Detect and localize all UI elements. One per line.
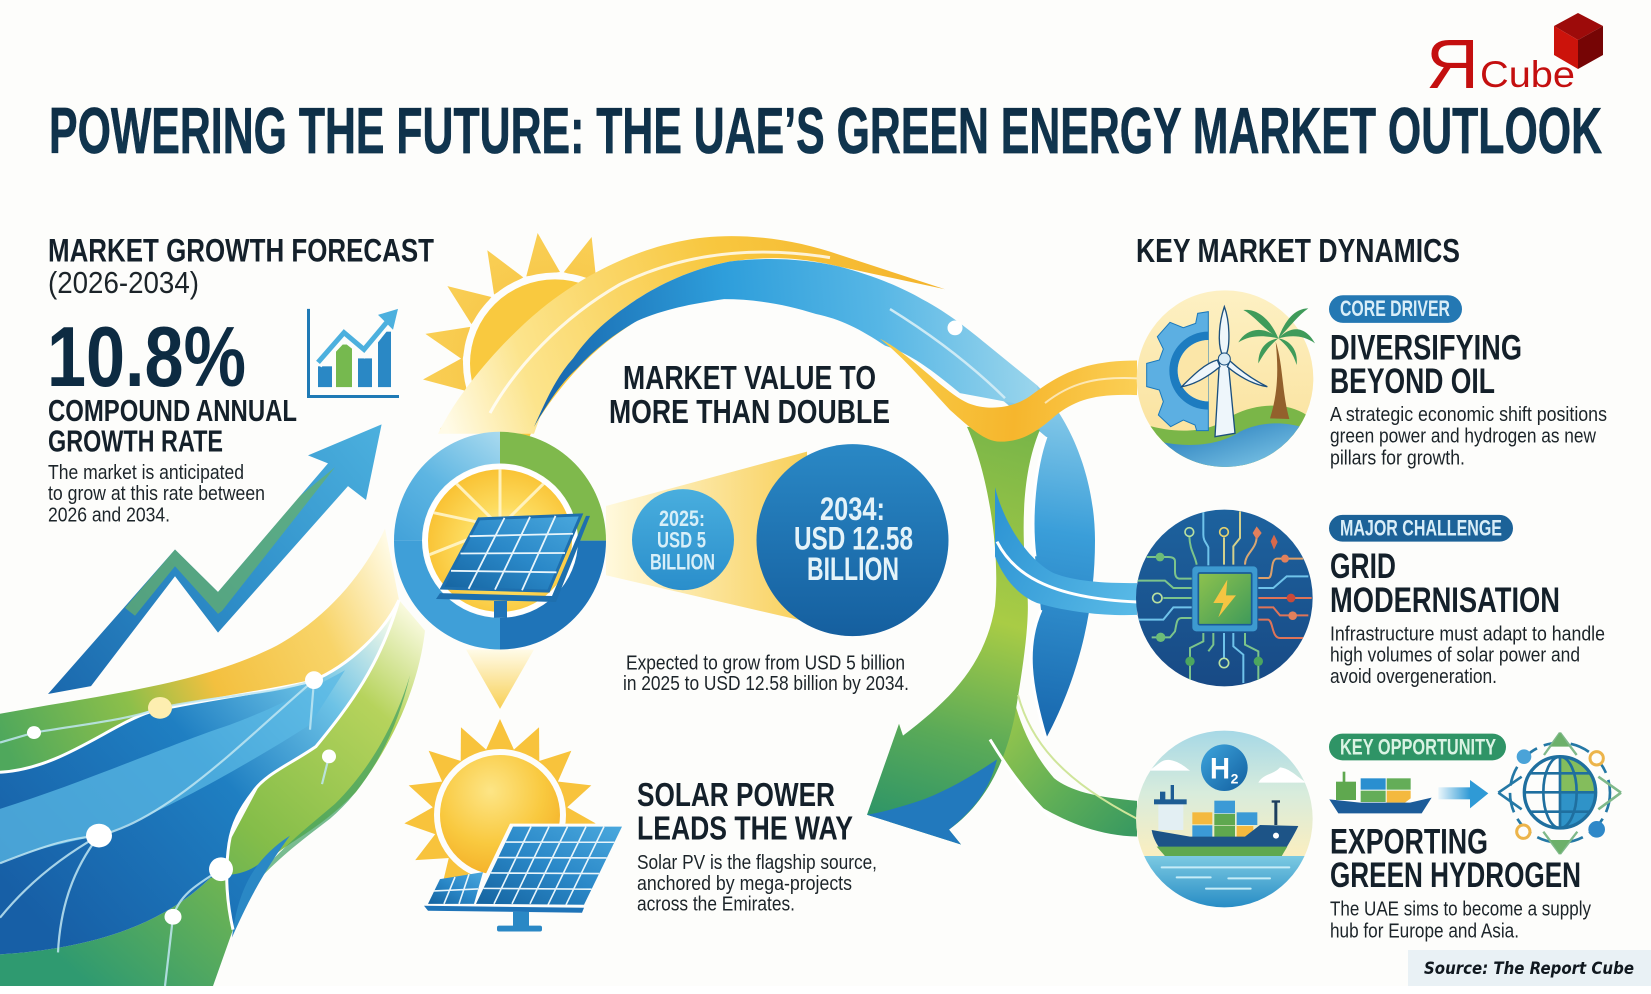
heading: grid modernisation: GRID [1330,546,1396,586]
connector: blue to grid modernisation [995,487,1137,615]
text block: diversifying description: green power and hydrogen as new [1330,426,1596,448]
heading: solar power: LEADS THE WAY [637,810,853,847]
heading: diversifying: DIVERSIFYING [1330,328,1522,367]
graphic: sweeping yellow and blue arc [438,236,1095,739]
panel: core driver [1329,295,1607,469]
stat label: GROWTH RATE [48,424,223,458]
bubble: 2034 value: BILLION [807,550,899,587]
text block: diversifying description: pillars for growth. [1330,448,1465,469]
heading: exporting green hydrogen: EXPORTING [1330,822,1488,861]
bubble: 2025 value: USD 5 [657,528,706,553]
heading: market growth forecast: MARKET GROWTH FORECAST [48,232,434,268]
icon: sun with solar panel [403,719,626,932]
connector: green to exporting hydrogen [990,664,1137,837]
connector: yellow to diversifying [880,339,1137,442]
tag: major challenge: MAJOR CHALLENGE [1340,516,1502,541]
text block: diversifying description: A strategic economic shift positions [1330,404,1607,426]
logo: RCube: Cube [1480,54,1575,95]
bubble: 2034 value: 2034: [820,490,885,527]
panel: key opportunity [1329,733,1621,942]
logo: RCube [1426,13,1603,103]
logo: RCube: Я [1426,25,1479,103]
source note [1408,950,1651,986]
cone: growth projection [606,452,807,622]
icon: cargo ship hydrogen [1130,730,1320,913]
panel: market growth forecast [47,232,434,527]
tag: core driver [1329,295,1462,323]
text block: growth description: to grow at this rate between [48,483,265,505]
bubble: 2025 value: 2025: [659,506,705,531]
arrow: down triangle [466,649,534,709]
text block: grid description: avoid overgeneration. [1330,666,1497,688]
text block: solar description: across the Emirates. [637,894,795,916]
icon: growth chart [308,309,399,397]
heading: key market dynamics: KEY MARKET DYNAMICS [1136,232,1460,269]
icon: central solar ring [394,432,606,649]
icon: cargo ship hydrogen: H [1210,752,1230,785]
text block: grid description: high volumes of solar power and [1330,644,1580,666]
bubble: 2034 value: USD 12.58 [794,520,913,557]
heading: solar power: SOLAR POWER [637,776,835,814]
bubble: 2034 value [756,444,948,636]
text block: hydrogen description: hub for Europe and Asia. [1330,921,1519,942]
text block: solar description: anchored by mega-projects [637,873,852,895]
icon: gear turbine palm [1136,290,1315,467]
text block: market value description: in 2025 to USD 12.58 billion by 2034. [623,673,909,695]
heading: market value: MARKET VALUE TO [623,359,876,397]
heading: market value: MORE THAN DOUBLE [609,393,890,431]
heading: grid modernisation: MODERNISATION [1330,580,1560,620]
icon: top sun [421,231,760,458]
text block: growth description: The market is anticipated [48,462,244,484]
text block: hydrogen description: The UAE sims to become a supply [1330,899,1592,921]
text block: grid description: Infrastructure must adapt to handle [1330,624,1605,646]
graphic: flowing energy wave [0,529,425,986]
text block: solar description: Solar PV is the flagship source, [637,852,877,874]
bubble: 2025 value: BILLION [650,549,715,574]
panel: solar power [637,776,877,916]
bubble: 2025 value [632,489,734,590]
text block: growth description: 2026 and 2034. [48,505,170,527]
icon: cargo ship hydrogen: 2 [1231,770,1239,786]
icon: grid circuit [1136,510,1313,686]
heading: diversifying: BEYOND OIL [1330,361,1495,401]
stat: 10.8%: 10.8% [47,311,246,405]
panel: major challenge [1329,515,1605,688]
text block: market value description: Expected to grow from USD 5 billion [626,652,905,674]
heading: years: (2026-2034) [48,265,199,300]
graphic: branching connectors [867,339,1137,844]
stat label: COMPOUND ANNUAL [48,393,297,428]
tag: core driver: CORE DRIVER [1340,296,1450,321]
arrow: green and blue down arrow [867,427,1137,844]
arrow: rising growth arrow [48,424,382,694]
icon: ship to globe export [1329,733,1621,854]
tag: key opportunity: KEY OPPORTUNITY [1340,734,1496,759]
